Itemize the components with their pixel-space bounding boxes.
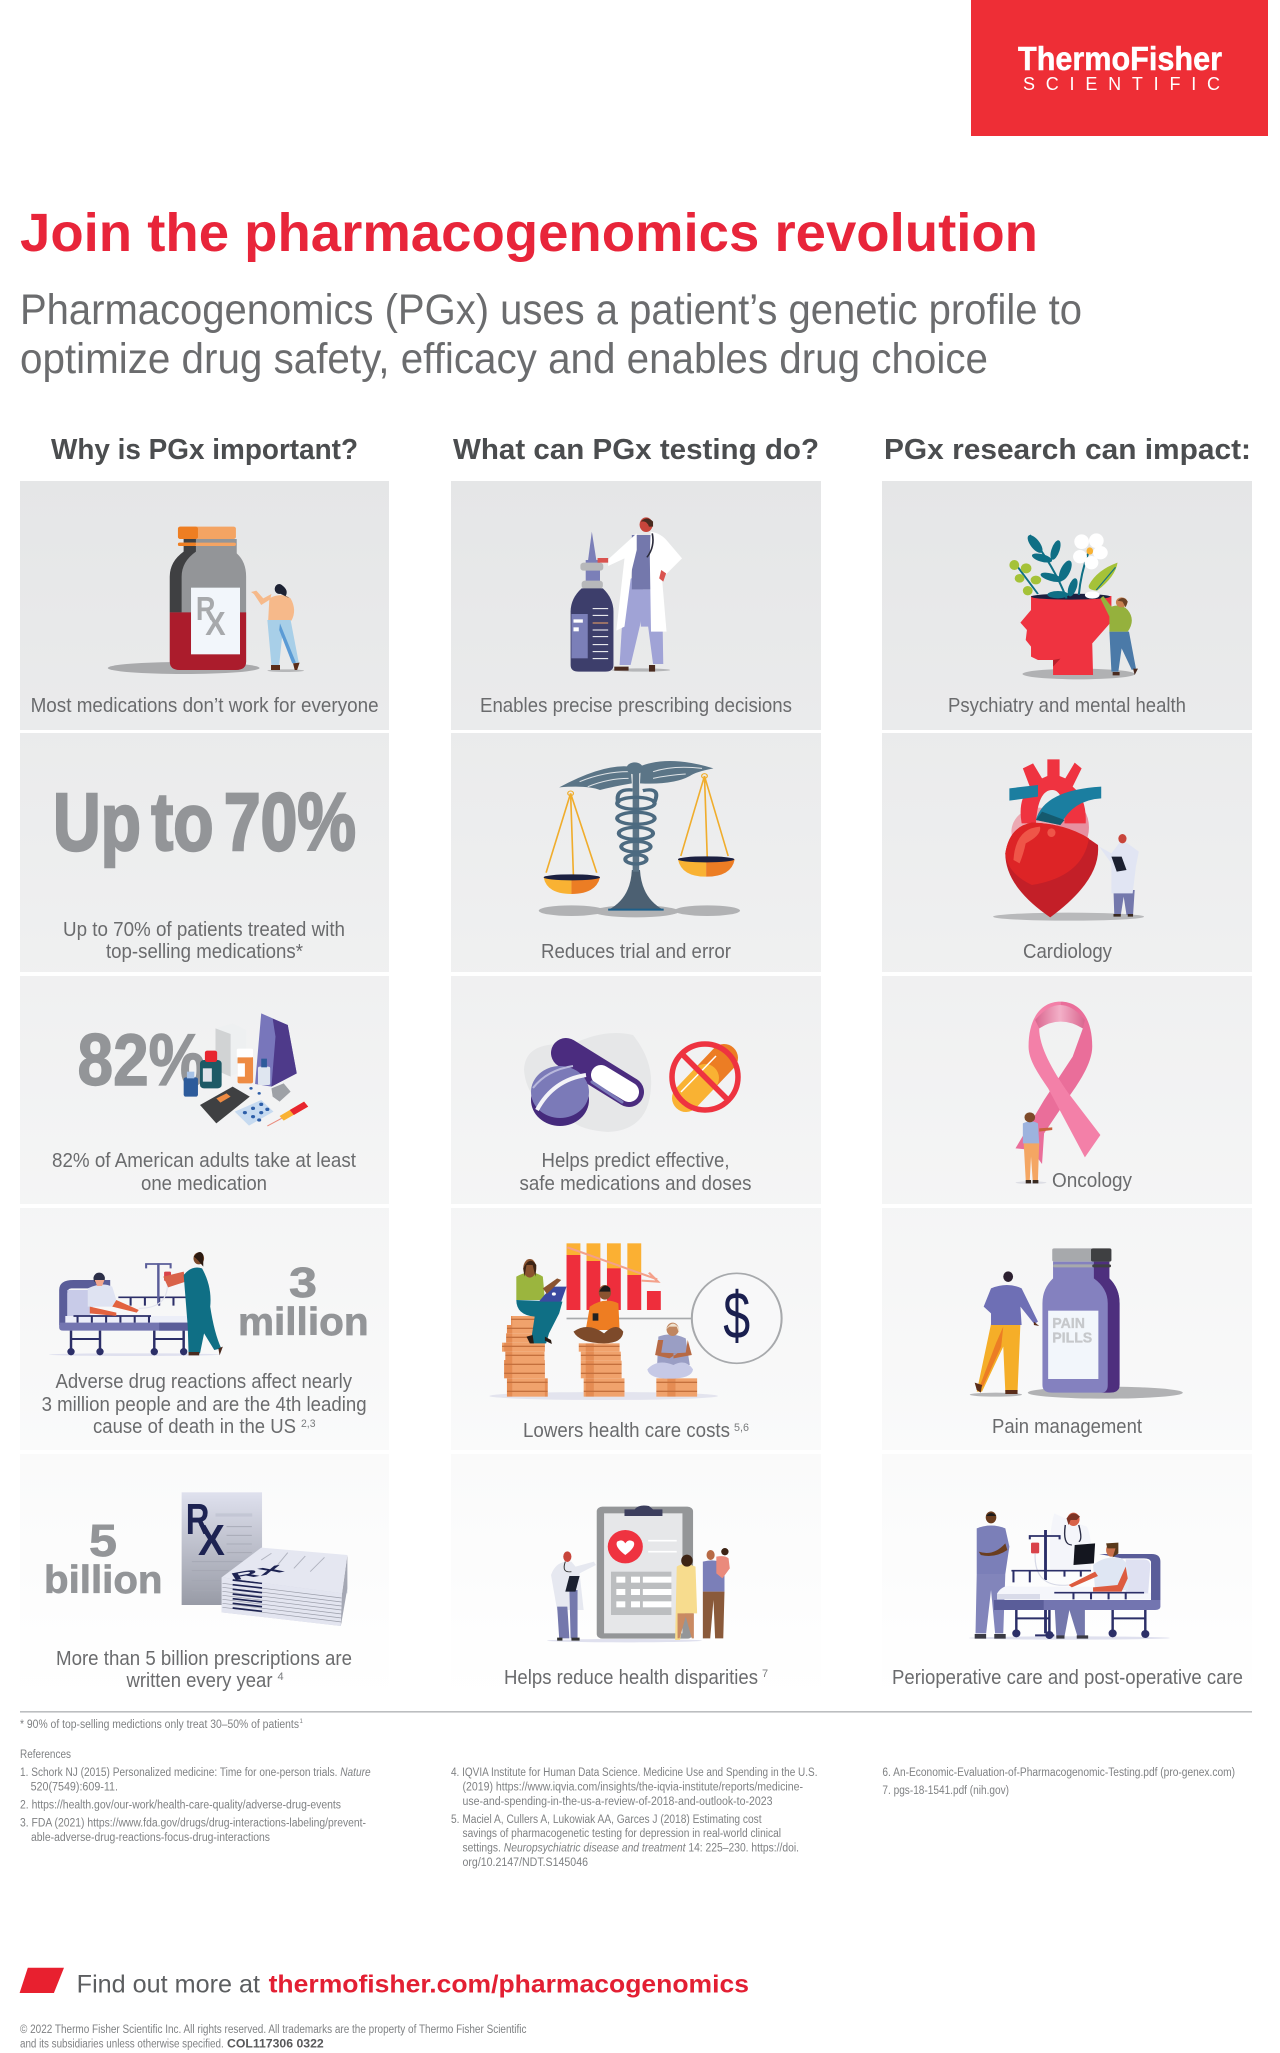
icon: Rx bottle and woman: [108, 527, 304, 674]
icon: prescription sheets: RX: [228, 1562, 287, 1583]
panel: health care costs: [451, 1208, 821, 1450]
column heading: impact: PGx research can impact:: [884, 434, 1251, 466]
icon: prescription sheets: [182, 1492, 347, 1626]
icon: head with plants and woman: [1009, 533, 1138, 679]
big number: [238, 1259, 369, 1344]
icon: prescription sheets: X: [198, 1517, 225, 1565]
references: column 2: settings. Neuropsychiatric disease and treatment 14: 225–230. https://doi.: [462, 1843, 799, 1855]
label: [42, 1370, 367, 1438]
label: Most medications don’t work for everyone: [31, 694, 379, 717]
icon: coins, chart and dollar: [489, 1243, 782, 1400]
big number: billion: [44, 1559, 162, 1602]
icon: pain pills bottle and man: [970, 1248, 1183, 1399]
icon: patient in bed and nurse: [49, 1252, 223, 1356]
icon: heart and doctor: [993, 759, 1144, 921]
icon: capsule crossed out: [672, 1044, 738, 1110]
panel: health disparities: [451, 1454, 821, 1694]
subtitle: [20, 286, 1082, 383]
big number: Up to 70%: [53, 777, 356, 868]
label: [52, 1149, 356, 1195]
icon: clipboard, doctor and family: [547, 1505, 730, 1642]
panel: 5 billion: [20, 1454, 389, 1694]
references heading: References: [20, 1749, 71, 1761]
label: Psychiatry and mental health: [948, 694, 1186, 717]
logo: Thermo Fisher Scientific: ThermoFisher: [1018, 40, 1222, 77]
references: column 1: 1. Schork NJ (2015) Personalized medicine: Time for one-person trials. Nature: [20, 1767, 371, 1779]
references: column 2: 5. Maciel A, Cullers A, Lukowiak AA, Garces J (2018) Estimating cost: [451, 1814, 762, 1826]
label: 82% of American adults take at least: [52, 1149, 356, 1172]
copyright: and its subsidiaries unless otherwise specified.: [20, 2039, 224, 2051]
panel: trial and error: [451, 733, 821, 972]
references: column 3: 6. An-Economic-Evaluation-of-Pharmacogenomic-Testing.pdf (pro-genex.com): [882, 1767, 1235, 1779]
big number: million: [238, 1301, 369, 1344]
references: column 1: able-adverse-drug-reactions-focus-drug-interactions: [31, 1832, 270, 1844]
call to action: [77, 1971, 749, 1999]
big number: 5: [89, 1515, 117, 1566]
logo: Thermo Fisher Scientific: SCIENTIFIC: [1023, 74, 1220, 94]
label: Up to 70% of patients treated with: [63, 918, 345, 941]
references: column 3: 7. pgs-18-1541.pdf (nih.gov): [882, 1785, 1009, 1797]
big number: [44, 1515, 162, 1602]
subtitle: optimize drug safety, efficacy and enables drug choice: [20, 335, 988, 383]
references: column 2: use-and-spending-in-the-us-a-review-of-2018-and-outlook-to-2023: [462, 1796, 772, 1808]
icon: Rx bottle and woman: X: [205, 605, 226, 642]
label: Reduces trial and error: [541, 940, 731, 963]
column heading: why: Why is PGx important?: [51, 434, 358, 466]
icon: red parallelogram: [20, 1968, 64, 1993]
icon: caduceus scales: [539, 761, 740, 917]
label: 7: [762, 1668, 768, 1680]
label: Perioperative care and post-operative care: [892, 1666, 1243, 1689]
label: 5,6: [734, 1422, 749, 1434]
label: [56, 1647, 352, 1692]
title: Join the pharmacogenomics revolution: [20, 203, 1038, 263]
icon: patient in bed with nurse and doctor: [969, 1511, 1170, 1640]
label: cause of death in the US: [93, 1415, 296, 1438]
panel: up to 70%: [20, 733, 389, 972]
logo: Thermo Fisher Scientific: [971, 0, 1268, 136]
icon: coins, chart and dollar: $: [723, 1278, 750, 1353]
icon: spray bottle and doctor: [571, 517, 682, 672]
label: Lowers health care costs: [523, 1419, 730, 1442]
panel: oncology: [882, 976, 1252, 1204]
footnote: * 90% of top-selling medictions only treat 30–50% of patients: [20, 1719, 299, 1731]
label: Helps reduce health disparities: [504, 1666, 758, 1689]
panel: pain management: [882, 1208, 1252, 1450]
label: safe medications and doses: [520, 1172, 752, 1195]
icon: pink ribbon and woman: [1016, 1002, 1100, 1184]
panel: psychiatry: [882, 481, 1252, 730]
label: Pain management: [992, 1415, 1142, 1438]
copyright: © 2022 Thermo Fisher Scientific Inc. All rights reserved. All trademarks are the property of Thermo Fisher Scientific: [20, 2024, 527, 2036]
panel: most medications: [20, 481, 389, 730]
label: Cardiology: [1023, 940, 1113, 963]
panel: 82%: [20, 976, 389, 1204]
panel: 3 million: [20, 1208, 389, 1450]
big number: 3: [289, 1259, 317, 1307]
icon: Rx bottle and woman: R: [196, 590, 216, 627]
label: More than 5 billion prescriptions are: [56, 1647, 352, 1670]
panel: cardiology: [882, 733, 1252, 972]
references: column 3: [882, 1767, 1235, 1797]
references: column 1: 520(7549):609-11.: [31, 1782, 118, 1794]
references: column 1: 3. FDA (2021) https://www.fda.gov/drugs/drug-interactions-labeling/prevent-: [20, 1818, 366, 1830]
call to action: thermofisher.com/pharmacogenomics: [269, 1971, 749, 1999]
references: column 2: (2019) https://www.iqvia.com/insights/the-iqvia-institute/reports/medicine-: [462, 1782, 803, 1794]
label: one medication: [141, 1172, 267, 1195]
subtitle: Pharmacogenomics (PGx) uses a patient’s genetic profile to: [20, 286, 1082, 334]
footnote: 1: [300, 1719, 304, 1725]
references: column 2: [451, 1767, 818, 1869]
references: column 2: 4. IQVIA Institute for Human Data Science. Medicine Use and Spending in the U.S.: [451, 1767, 818, 1779]
panel: effective medications: [451, 976, 821, 1204]
label: Helps predict effective,: [542, 1149, 730, 1172]
call to action: Find out more at: [77, 1971, 260, 1999]
copyright: [20, 2024, 527, 2051]
big number: 82%: [78, 1020, 206, 1101]
references: column 1: 2. https://health.gov/our-work/health-care-quality/adverse-drug-events: [20, 1800, 341, 1812]
icon: pills: [524, 1033, 651, 1132]
label: top-selling medications*: [106, 940, 303, 963]
panel: perioperative: [882, 1454, 1252, 1694]
label: [520, 1149, 752, 1195]
label: [63, 918, 345, 963]
label: 3 million people and are the 4th leading: [42, 1393, 367, 1416]
label: written every year: [126, 1669, 273, 1692]
icon: prescription sheets: R: [186, 1496, 209, 1544]
label: Enables precise prescribing decisions: [480, 694, 792, 717]
label: 4: [278, 1671, 284, 1683]
panel: precise prescribing: [451, 481, 821, 730]
references: column 2: savings of pharmacogenetic testing for depression in real-world clinical: [462, 1828, 781, 1840]
label: 2,3: [301, 1418, 316, 1430]
icon: pain pills bottle and man: PILLS: [1052, 1330, 1092, 1346]
column heading: what: What can PGx testing do?: [453, 434, 819, 466]
icon: pain pills bottle and man: PAIN: [1052, 1315, 1085, 1332]
references: column 1: [20, 1767, 371, 1844]
references: column 2: org/10.2147/NDT.S145046: [462, 1857, 588, 1869]
label: Adverse drug reactions affect nearly: [56, 1370, 353, 1393]
icon: assorted medications: [184, 1013, 308, 1126]
label: Oncology: [1052, 1169, 1133, 1192]
copyright: COL117306 0322: [227, 2039, 324, 2051]
